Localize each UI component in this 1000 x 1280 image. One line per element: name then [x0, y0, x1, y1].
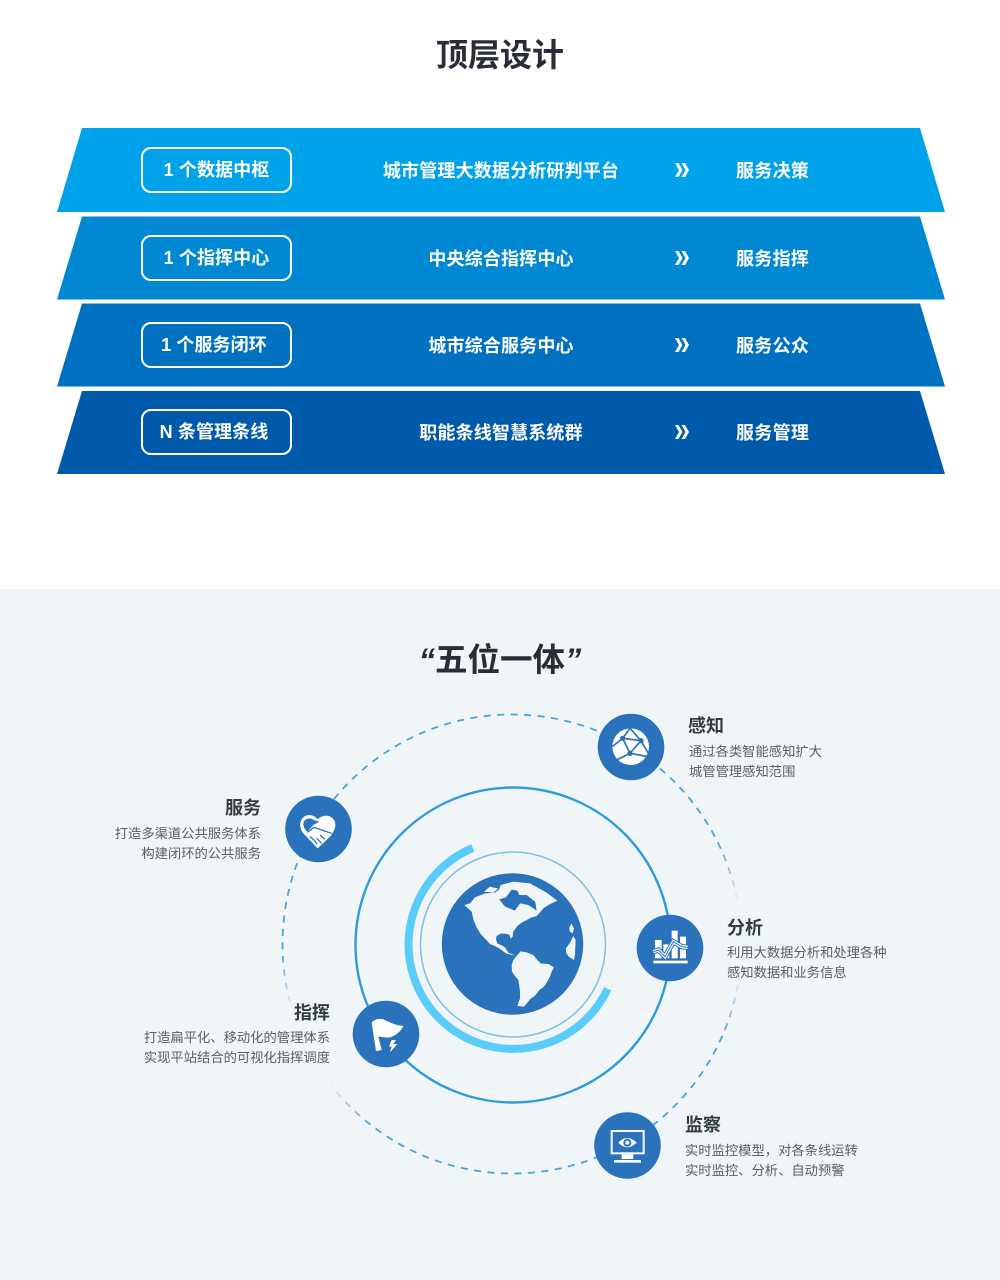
- outcome text: 服务管理: [736, 423, 809, 443]
- dashed outer orbit: [282, 714, 742, 1174]
- platform text: 城市管理大数据分析研判平台: [383, 161, 619, 181]
- icon: double chevron: [675, 163, 689, 177]
- text block: service: 服务: [225, 798, 261, 818]
- text block: command: 指挥: [294, 1003, 330, 1023]
- label pill: 1 service loop: [141, 322, 292, 368]
- platform text: 城市综合服务中心: [428, 336, 574, 356]
- text block: monitoring: [685, 1115, 858, 1178]
- panel: row 4 management lines: [57, 391, 945, 474]
- light blue arc: [409, 848, 608, 1049]
- node: service: [285, 796, 352, 862]
- outcome text: 服务公众: [736, 336, 809, 356]
- panel: row 3 service loop: [57, 304, 945, 386]
- panel: row 2 command centre: [57, 216, 945, 300]
- label pill: 1 command centre: 1 个指挥中心: [164, 248, 269, 268]
- solid middle orbit: [356, 788, 670, 1102]
- icon: monitor with eye: [612, 1131, 644, 1163]
- icon: network globe: [612, 728, 649, 765]
- platform text: 中央综合指挥中心: [428, 248, 574, 268]
- node: monitoring: [594, 1112, 661, 1179]
- outcome text: 服务决策: [736, 161, 809, 181]
- thin inner ring: [420, 852, 606, 1037]
- text block: perception: 城管管理感知范围: [689, 764, 795, 779]
- node: perception: [598, 714, 664, 780]
- label pill: N management lines: [141, 409, 292, 455]
- outcome text: 服务指挥: [736, 248, 809, 268]
- panel: row 1 data hub: [57, 128, 945, 212]
- icon: double chevron: [675, 338, 689, 352]
- text block: perception: 感知: [688, 716, 724, 736]
- label pill: N management lines: N 条管理条线: [160, 422, 268, 442]
- icon: double chevron: [675, 425, 689, 439]
- text block: analysis: 感知数据和业务信息: [727, 965, 847, 980]
- title: five-in-one: “五位一体”: [419, 642, 581, 678]
- text block: monitoring: 实时监控模型，对各条线运转: [685, 1143, 858, 1158]
- platform text: 职能条线智慧系统群: [419, 423, 583, 443]
- label pill: 1 data hub: [141, 147, 292, 193]
- text block: command: [144, 1003, 330, 1065]
- text block: perception: 通过各类智能感知扩大: [689, 744, 822, 759]
- panel: five-in-one section: [0, 589, 1000, 1280]
- diagram: orbit rings and nodes: [282, 714, 739, 1179]
- icon: handshake heart: [300, 815, 335, 848]
- label pill: 1 command centre: [141, 234, 292, 280]
- icon: bar and line chart: [653, 931, 688, 963]
- text block: service: 构建闭环的公共服务: [141, 846, 261, 861]
- text block: monitoring: 实时监控、分析、自动预警: [685, 1163, 845, 1178]
- icon: globe: [442, 873, 583, 1015]
- text block: analysis: 分析: [727, 918, 763, 938]
- icon: double chevron: [675, 251, 689, 265]
- label pill: 1 data hub: 1 个数据中枢: [164, 160, 269, 180]
- text block: analysis: [727, 918, 887, 980]
- text block: monitoring: 监察: [685, 1115, 721, 1135]
- text block: service: [115, 798, 261, 861]
- node: command: [353, 1001, 419, 1067]
- title: top-level design: 顶层设计: [436, 37, 564, 73]
- text block: command: 打造扁平化、移动化的管理体系: [144, 1030, 330, 1045]
- icon: flag with lightning: [372, 1019, 403, 1052]
- text block: service: 打造多渠道公共服务体系: [115, 826, 261, 841]
- node: analysis: [637, 915, 703, 981]
- text block: analysis: 利用大数据分析和处理各种: [727, 945, 887, 960]
- label pill: 1 service loop: 1 个服务闭环: [161, 334, 267, 354]
- text block: perception: [688, 716, 822, 779]
- text block: command: 实现平站结合的可视化指挥调度: [144, 1050, 330, 1065]
